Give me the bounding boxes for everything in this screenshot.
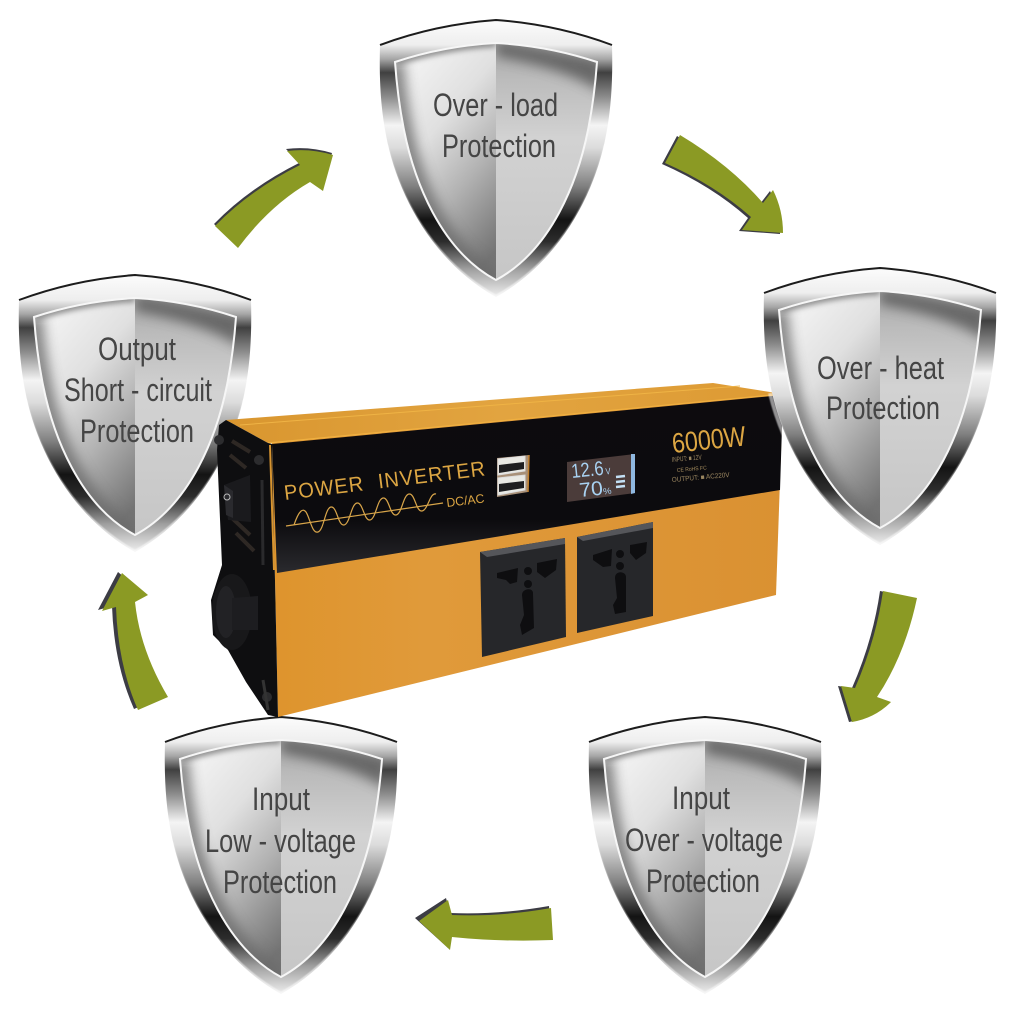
lcd display: [567, 454, 635, 502]
power inverter: [211, 383, 783, 717]
panel: shield over-heat protection: [764, 268, 996, 545]
text: input low-voltage protection: Low - voltage: [205, 823, 356, 859]
rating text: 6000W: INPUT: ■ 12V: [672, 454, 702, 464]
panel: shield input over-voltage protection: [589, 717, 821, 994]
inverter black band: [272, 395, 783, 573]
panel: shield output short-circuit protection: [19, 275, 251, 552]
arrow: low-voltage to short-circuit: [98, 572, 168, 710]
text: over-heat protection: Over - heat: [817, 350, 944, 386]
sine wave: [286, 494, 443, 532]
inverter side panel: [211, 420, 278, 717]
text: over-heat protection: Protection: [826, 390, 940, 426]
power switch: [224, 475, 251, 522]
text: input over-voltage protection: Over - voltage: [625, 822, 783, 858]
text: output short-circuit protection: Protection: [80, 413, 194, 449]
arrow: over-voltage to low-voltage: [415, 898, 553, 950]
logo text: power inverter dc/ac: POWER INVERTER: [283, 457, 487, 505]
arrow: short-circuit to over-load: [214, 148, 333, 248]
text: over-load protection: Over - load: [433, 87, 558, 123]
lcd display: 70%: [578, 477, 612, 502]
text: input over-voltage protection: Protection: [646, 863, 760, 899]
rating text: 6000W: CE RoHS FC: [677, 465, 707, 474]
text: output short-circuit protection: [64, 331, 212, 449]
text: input low-voltage protection: Protection: [223, 864, 337, 900]
text: input low-voltage protection: [205, 781, 356, 900]
text: over-load protection: [433, 87, 558, 164]
socket 2: [577, 522, 653, 633]
inverter orange front: [272, 394, 783, 717]
rating text: 6000W: [670, 420, 748, 484]
logo text: power inverter dc/ac: DC/AC: [446, 491, 485, 510]
lcd display: 12.6V: [570, 457, 611, 483]
panel: shield over-load protection: [380, 20, 612, 297]
text: input over-voltage protection: Input: [672, 780, 730, 816]
text: output short-circuit protection: Output: [98, 331, 176, 367]
text: input over-voltage protection: [625, 780, 783, 899]
text: over-heat protection: [817, 350, 944, 426]
text: input low-voltage protection: Input: [252, 781, 310, 817]
rating text: 6000W: 6000W: [670, 420, 748, 459]
arrow: over-load to over-heat: [662, 135, 783, 234]
text: output short-circuit protection: Short - circuit: [64, 372, 212, 408]
panel: shield input low-voltage protection: [165, 717, 397, 994]
usb ports: [497, 455, 529, 497]
text: over-load protection: Protection: [442, 128, 556, 164]
socket 1: [480, 538, 566, 657]
rating text: 6000W: OUTPUT: ■ AC220V: [672, 472, 730, 484]
dc terminal: [212, 574, 258, 650]
arrow: over-heat to over-voltage: [838, 591, 917, 722]
inverter top face: [226, 383, 783, 443]
